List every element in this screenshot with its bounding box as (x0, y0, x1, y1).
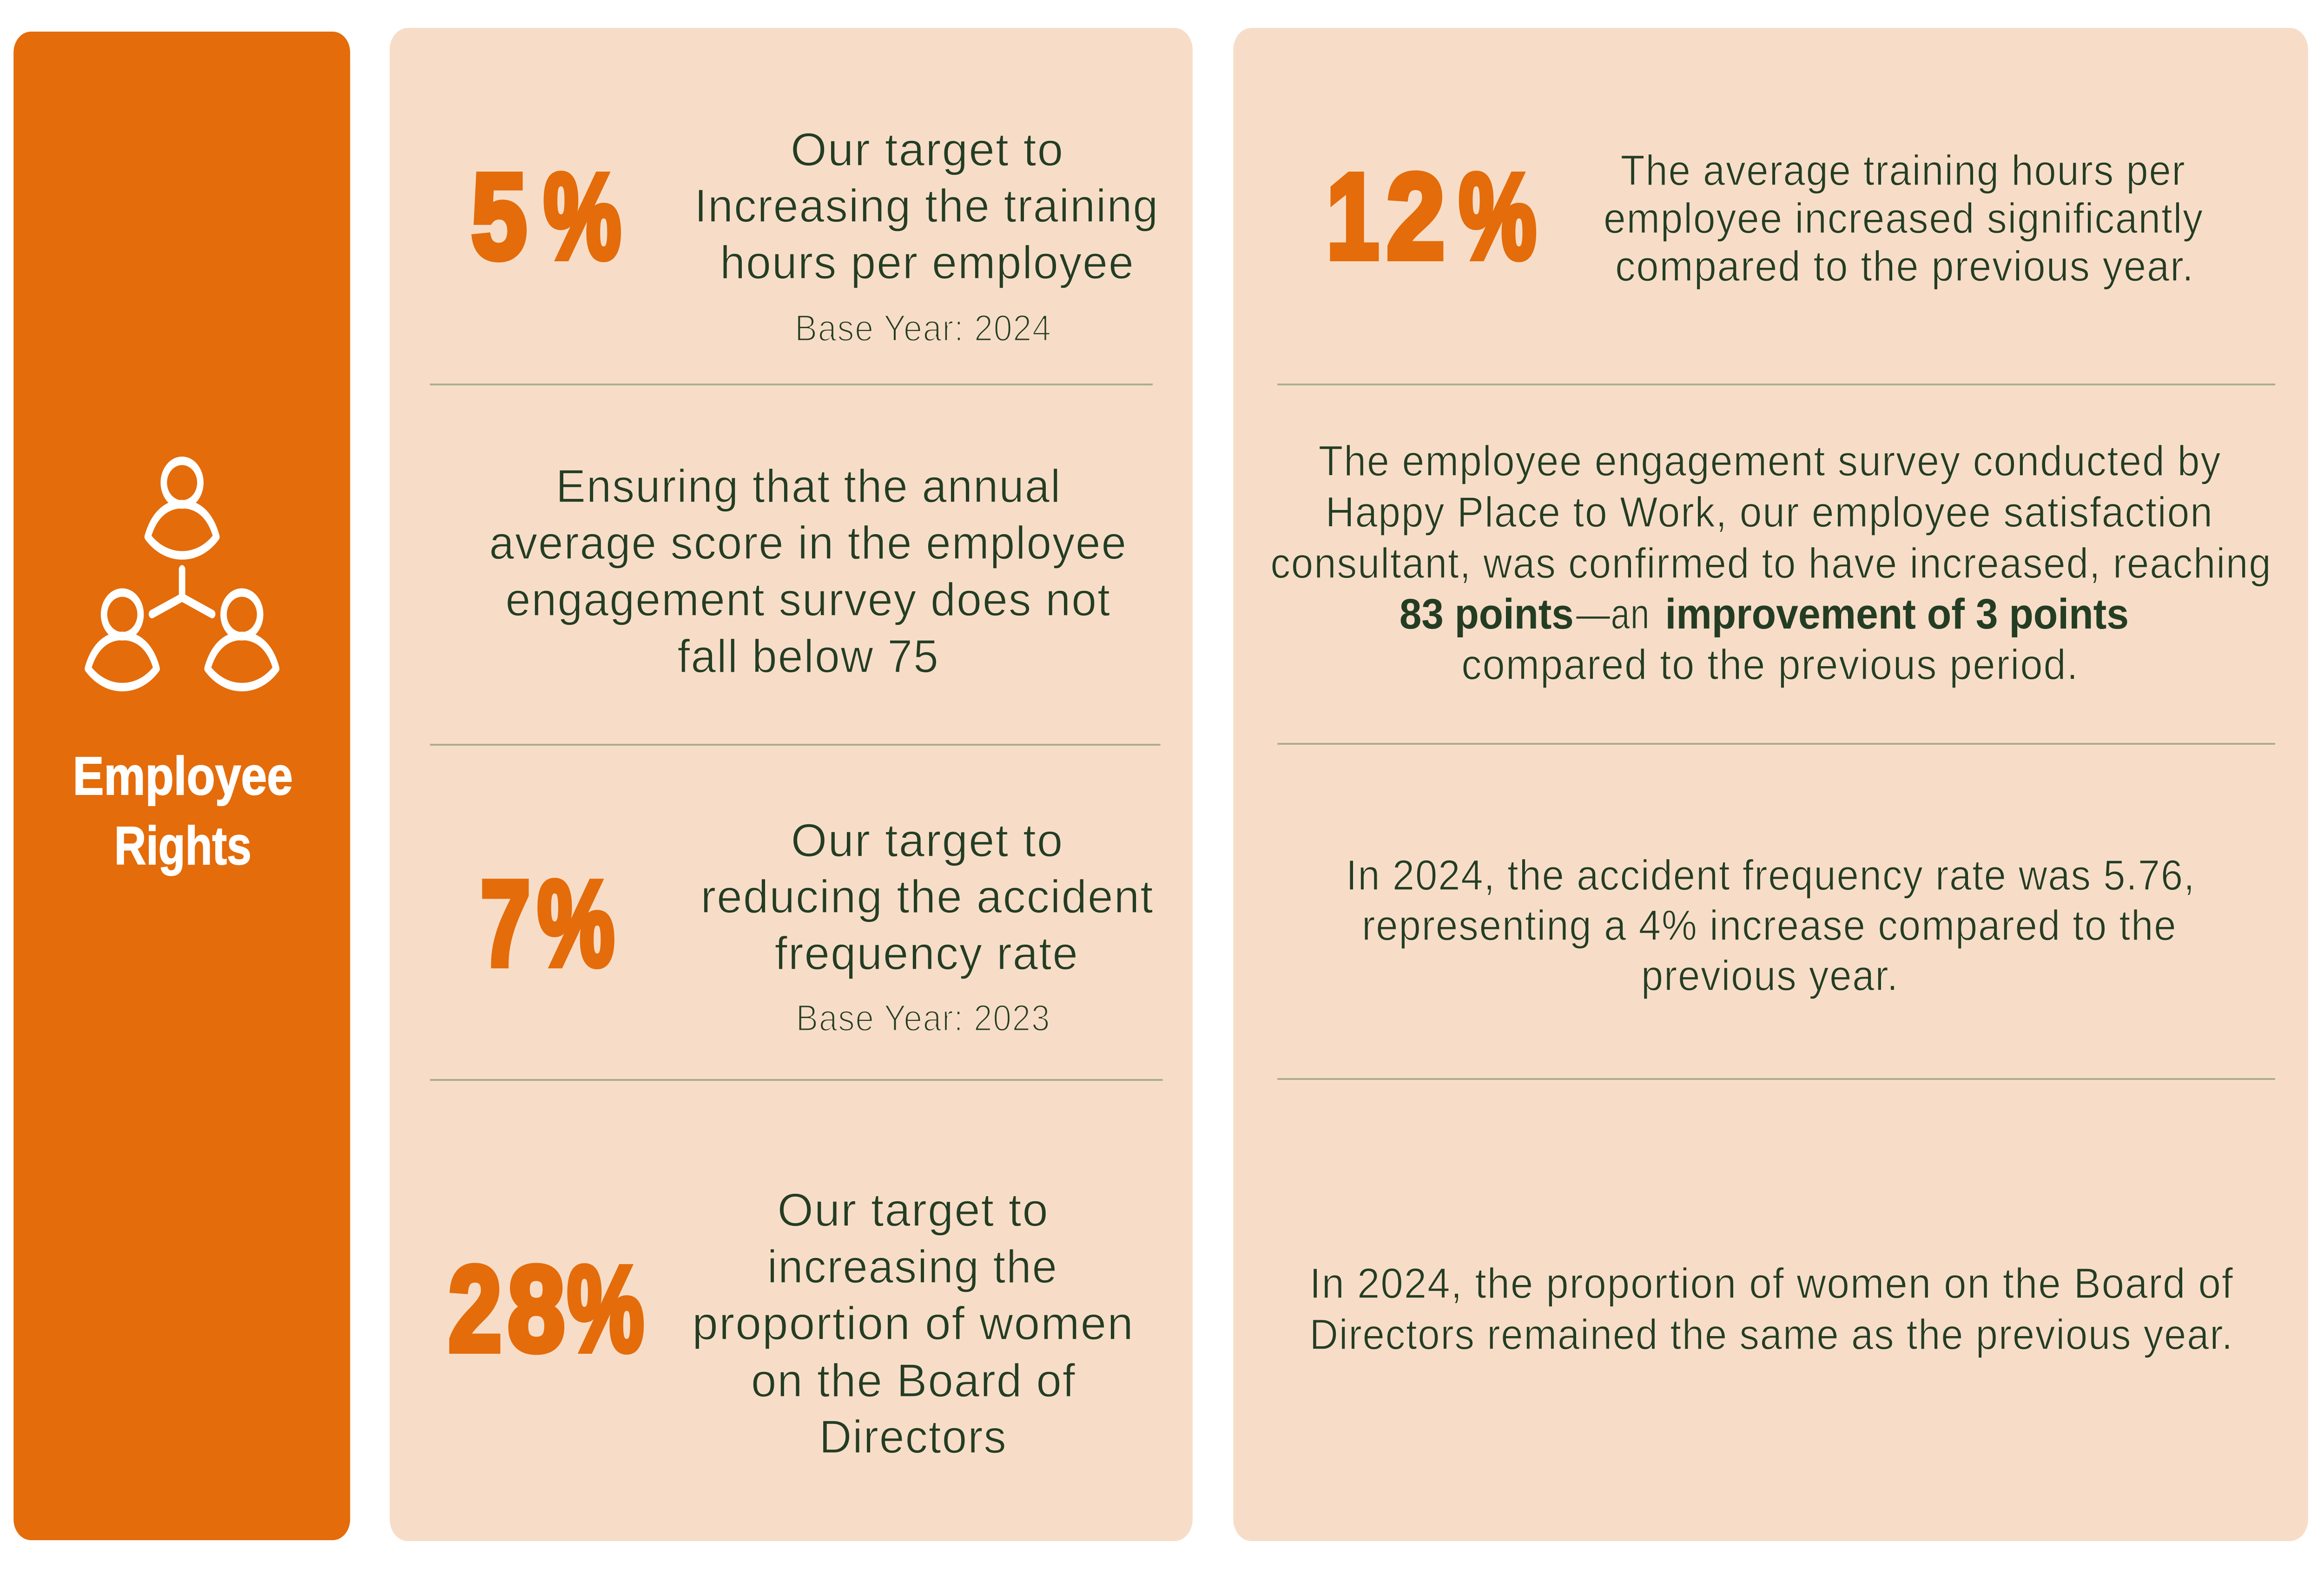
text: accident frequency result: representing a 4% increase compared to the (1362, 901, 2177, 949)
text: accident frequency target: frequency rate (775, 927, 1079, 980)
stat: 7% (481, 855, 614, 991)
text: accident frequency target (701, 814, 1154, 1039)
stat: 12%: 1 (1327, 148, 1379, 284)
text: women on board target: proportion of women (692, 1298, 1134, 1350)
stat: 12%: % (1459, 148, 1536, 284)
stat: 5%: 5 (471, 148, 527, 284)
text: women on board target: on the Board of (751, 1355, 1076, 1407)
text: women on board result: Directors remained the same as the previous year. (1310, 1310, 2233, 1358)
panel: targets (390, 28, 1193, 1541)
text: training hours result: The average training hours per (1621, 146, 2186, 194)
stat: 12% (1327, 148, 1536, 284)
text: engagement survey result: 83 points (1400, 589, 1574, 638)
text: engagement survey result (1270, 437, 2272, 689)
text: training hours result (1604, 146, 2204, 290)
text: engagement survey target (489, 460, 1127, 682)
text: engagement survey result: consultant, was confirmed to have increased, reaching (1270, 539, 2272, 587)
stat: 7%: % (538, 855, 614, 991)
stat: 28%: % (568, 1241, 644, 1376)
text: training hours target (694, 124, 1159, 349)
text: engagement survey target: engagement survey does not (506, 574, 1111, 626)
text: women on board target (692, 1184, 1134, 1463)
heading: Employee Rights: Employee (73, 746, 293, 806)
text: engagement survey target: Ensuring that the annual (556, 460, 1061, 512)
text: accident frequency target: reducing the accident (701, 871, 1154, 923)
text: training hours target: Increasing the training (694, 180, 1159, 232)
text: women on board result: In 2024, the proportion of women on the Board of (1310, 1259, 2234, 1307)
heading: Employee Rights: Rights (114, 815, 251, 876)
stat: 28% (449, 1241, 644, 1376)
text: accident frequency result (1346, 851, 2195, 1000)
text: accident frequency target: Our target to (791, 814, 1063, 867)
text: training hours result: employee increased significantly (1604, 194, 2204, 242)
stat: 5% (471, 148, 621, 284)
panel: results (1233, 28, 2308, 1541)
heading: Employee Rights (73, 746, 293, 876)
text: accident frequency result: previous year. (1641, 951, 1899, 1000)
text: training hours target: Base Year: 2024 (795, 307, 1052, 349)
text: training hours target: Our target to (791, 124, 1064, 176)
stat: 5%: % (544, 148, 621, 284)
text: women on board target: increasing the (767, 1241, 1058, 1293)
stat: 28%: 2 (449, 1241, 502, 1376)
text: women on board target: Directors (819, 1411, 1007, 1463)
stat: 7%: 7 (481, 855, 530, 991)
text: women on board result (1310, 1259, 2234, 1358)
text: engagement survey result: The employee engagement survey conducted by (1319, 437, 2221, 485)
text: training hours target: hours per employee (720, 237, 1135, 289)
text: engagement survey result: compared to the previous period. (1461, 640, 2079, 689)
stat: 12%: 2 (1386, 148, 1445, 284)
text: engagement survey result: improvement of 3 points (1665, 589, 2129, 638)
panel: employee rights sidebar (13, 32, 350, 1540)
text: engagement survey result: —an (1576, 589, 1650, 638)
text: accident frequency result: In 2024, the accident frequency rate was 5.76, (1346, 851, 2195, 899)
text: accident frequency target: Base Year: 2023 (796, 997, 1050, 1039)
text: women on board target: Our target to (778, 1184, 1049, 1236)
icon: three connected people (88, 461, 276, 687)
stat: 28%: 8 (508, 1241, 565, 1376)
text: engagement survey target: average score in the employee (489, 517, 1127, 569)
text: engagement survey target: fall below 75 (678, 630, 939, 682)
text: engagement survey result: Happy Place to Work, our employee satisfaction (1326, 488, 2213, 536)
text: training hours result: compared to the previous year. (1615, 242, 2194, 290)
